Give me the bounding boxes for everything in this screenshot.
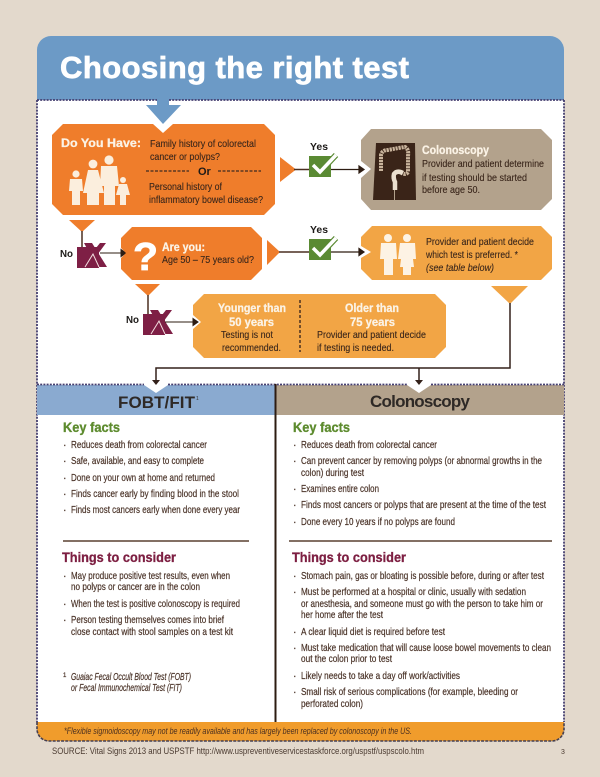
icon: question mark: ? xyxy=(133,236,158,279)
text: older than 75: if testing is needed. xyxy=(317,342,394,354)
column header: FOBT/FIT: FOBT/FIT xyxy=(118,393,196,412)
panel: FOBT things to consider: · xyxy=(63,598,66,610)
source line: SOURCE: Vital Signs 2013 and USPSTF http://www.uspreventiveservicestaskforce.org/uspstf/uspscolo.htm xyxy=(52,746,424,757)
panel: FOBT things to consider: May produce positive test results, even when xyxy=(71,570,230,582)
text: younger than 50: 50 years xyxy=(229,317,274,329)
label: no: No xyxy=(126,314,139,326)
text: younger than 50: recommended. xyxy=(222,342,281,354)
icon: family xyxy=(69,155,130,205)
panel: FOBT key facts: · xyxy=(63,488,66,500)
panel: colonoscopy things to consider: her home after the test xyxy=(301,609,383,621)
text: provider decision: (see table below) xyxy=(426,262,494,274)
header banner xyxy=(37,36,564,100)
icon: x mark xyxy=(77,243,107,268)
panel: colonoscopy things to consider: · xyxy=(293,570,296,582)
text: younger than 50 xyxy=(218,303,286,354)
heading: do you have: Do You Have: xyxy=(61,138,141,150)
panel: colonoscopy things to consider: out the colon prior to test xyxy=(301,653,392,665)
connector: provider panel to test columns xyxy=(152,286,528,385)
panel: colonoscopy key facts: Reduces death from colorectal cancer xyxy=(301,439,437,451)
icon: x mark xyxy=(143,310,173,335)
panel: younger or older xyxy=(193,294,446,358)
footnote: test definitions xyxy=(63,671,191,694)
heading: things to consider: Things to consider xyxy=(62,549,176,565)
icon: patient and doctor xyxy=(380,234,416,275)
panel: FOBT things to consider xyxy=(62,549,240,638)
arrow: down to no xyxy=(69,220,95,247)
panel: FOBT things to consider: Person testing themselves comes into brief xyxy=(71,614,224,626)
panel: colonoscopy key facts: · xyxy=(293,439,296,451)
panel: FOBT key facts: · xyxy=(63,504,66,516)
arrow: box one to yes xyxy=(280,157,310,182)
panel: colonoscopy things to consider: Must be performed at a hospital or clinic, usually with sedation xyxy=(301,586,526,598)
icon: colon illustration xyxy=(373,143,416,200)
text: provider decision: Provider and patient decide xyxy=(426,236,534,248)
panel: colonoscopy things to consider: · xyxy=(293,670,296,682)
panel: colonoscopy things to consider: A clear liquid diet is required before test xyxy=(301,626,445,638)
panel: FOBT key facts: · xyxy=(63,472,66,484)
text: provider decision: which test is preferred. * xyxy=(425,249,518,261)
text: colonoscopy body xyxy=(422,158,544,196)
arrow: header to first question xyxy=(146,99,181,124)
text: personal history: inflammatory bowel disease? xyxy=(149,194,263,206)
panel: FOBT things to consider: · xyxy=(63,614,66,626)
panel: FOBT key facts: · xyxy=(63,455,66,467)
label: no: No xyxy=(60,248,73,260)
panel: FOBT things to consider: close contact with stool samples on a test kit xyxy=(71,626,233,638)
icon: check mark xyxy=(309,155,336,177)
title: Choosing the right test xyxy=(60,50,409,85)
text: age range: Age 50 – 75 years old? xyxy=(162,254,254,266)
panel: do you have xyxy=(52,124,275,215)
panel: colonoscopy things to consider: · xyxy=(293,626,296,638)
panel: FOBT key facts xyxy=(63,419,240,516)
panel: are you xyxy=(121,227,262,280)
footnote: test definitions: or Fecal Immunochemical Test (FIT) xyxy=(71,682,182,694)
panel: colonoscopy things to consider: · xyxy=(293,642,296,654)
text: older than 75: 75 years xyxy=(350,317,395,329)
column header: FOBT/FIT xyxy=(37,385,275,415)
text: or separator xyxy=(146,166,261,178)
heading: things to consider: Things to consider xyxy=(292,549,406,565)
panel: colonoscopy recommendation xyxy=(361,129,552,210)
panel: colonoscopy key facts: · xyxy=(293,455,296,467)
text: colonoscopy body: Provider and patient determine xyxy=(422,158,544,170)
footnote: test definitions: 1 xyxy=(63,673,67,679)
text: family history xyxy=(150,138,256,163)
panel: FOBT key facts: · xyxy=(63,439,66,451)
panel: FOBT things to consider: · xyxy=(63,570,66,582)
text: are you heading: Are you: xyxy=(162,242,205,254)
text: colonoscopy body: if testing should be started xyxy=(422,172,527,184)
column header: colonoscopy xyxy=(276,385,564,415)
arrow: are you to yes xyxy=(267,240,310,265)
panel: colonoscopy key facts: · xyxy=(293,499,296,511)
text: older than 75 xyxy=(317,303,426,354)
text: personal history: Personal history of xyxy=(149,181,222,193)
text: family history: Family history of colorectal xyxy=(150,138,256,150)
panel: colonoscopy things to consider: Small risk of serious complications (for example, bleeding or xyxy=(301,686,518,698)
footnote: test definitions: Guaiac Fecal Occult Blood Test (FOBT) xyxy=(71,671,191,683)
text: provider decision xyxy=(425,236,534,274)
panel: colonoscopy things to consider: · xyxy=(293,686,296,698)
text: younger than 50: Testing is not xyxy=(221,329,273,341)
panel: FOBT key facts: Safe, available, and easy to complete xyxy=(71,455,204,467)
text: colonoscopy heading: Colonoscopy xyxy=(422,145,490,157)
footer note band: *Flexible sigmoidoscopy may not be readily available and has largely been replaced by colonoscopy in the US. xyxy=(64,726,412,737)
panel: colonoscopy key facts: Done every 10 years if no polyps are found xyxy=(301,516,455,528)
panel: FOBT key facts: Done on your own at home and returned xyxy=(71,472,215,484)
arrow: no to are you xyxy=(100,250,126,256)
arrow: down to no xyxy=(135,284,160,314)
heading: key facts: Key facts xyxy=(293,419,350,435)
panel: provider and patient decide xyxy=(361,226,552,280)
column header: colonoscopy: Colonoscopy xyxy=(370,392,471,411)
arrow: check to provider panel xyxy=(331,248,364,256)
arrow: check to colonoscopy xyxy=(331,166,364,173)
heading: key facts: Key facts xyxy=(63,419,120,435)
text: younger than 50: Younger than xyxy=(218,303,286,315)
panel: colonoscopy key facts: · xyxy=(293,483,296,495)
arrow: no to age panel xyxy=(165,318,198,326)
text: family history: cancer or polyps? xyxy=(150,151,220,163)
panel: FOBT key facts: Finds cancer early by finding blood in the stool xyxy=(71,488,239,500)
text: or separator: Or xyxy=(198,166,212,178)
panel: colonoscopy things to consider: · xyxy=(293,586,296,598)
text: personal history xyxy=(149,181,263,206)
text: older than 75: Older than xyxy=(345,303,399,315)
panel: colonoscopy key facts xyxy=(293,419,546,528)
text: older than 75: Provider and patient decide xyxy=(317,329,426,341)
panel: colonoscopy key facts: colon) during test xyxy=(301,467,364,479)
panel: FOBT things to consider: When the test is positive colonoscopy is required xyxy=(71,598,240,610)
label: yes: Yes xyxy=(310,141,328,153)
page number: 3 xyxy=(561,749,565,756)
panel: colonoscopy things to consider xyxy=(292,549,551,710)
column header: FOBT/FIT: 1 xyxy=(196,396,199,402)
panel: colonoscopy key facts: Examines entire colon xyxy=(301,483,379,495)
text: colonoscopy body: before age 50. xyxy=(422,184,480,196)
panel: FOBT key facts: Reduces death from colorectal cancer xyxy=(71,439,207,451)
panel: FOBT key facts: Finds most cancers early when done every year xyxy=(71,504,240,516)
icon: check mark xyxy=(309,238,336,260)
footer note band xyxy=(37,722,564,741)
panel: colonoscopy key facts: · xyxy=(293,516,296,528)
panel: FOBT things to consider: no polyps or cancer are in the colon xyxy=(71,581,200,593)
panel: colonoscopy things to consider: Likely needs to take a day off work/activities xyxy=(301,670,460,682)
panel: colonoscopy things to consider: perforated colon) xyxy=(301,698,363,710)
label: yes: Yes xyxy=(310,224,328,236)
